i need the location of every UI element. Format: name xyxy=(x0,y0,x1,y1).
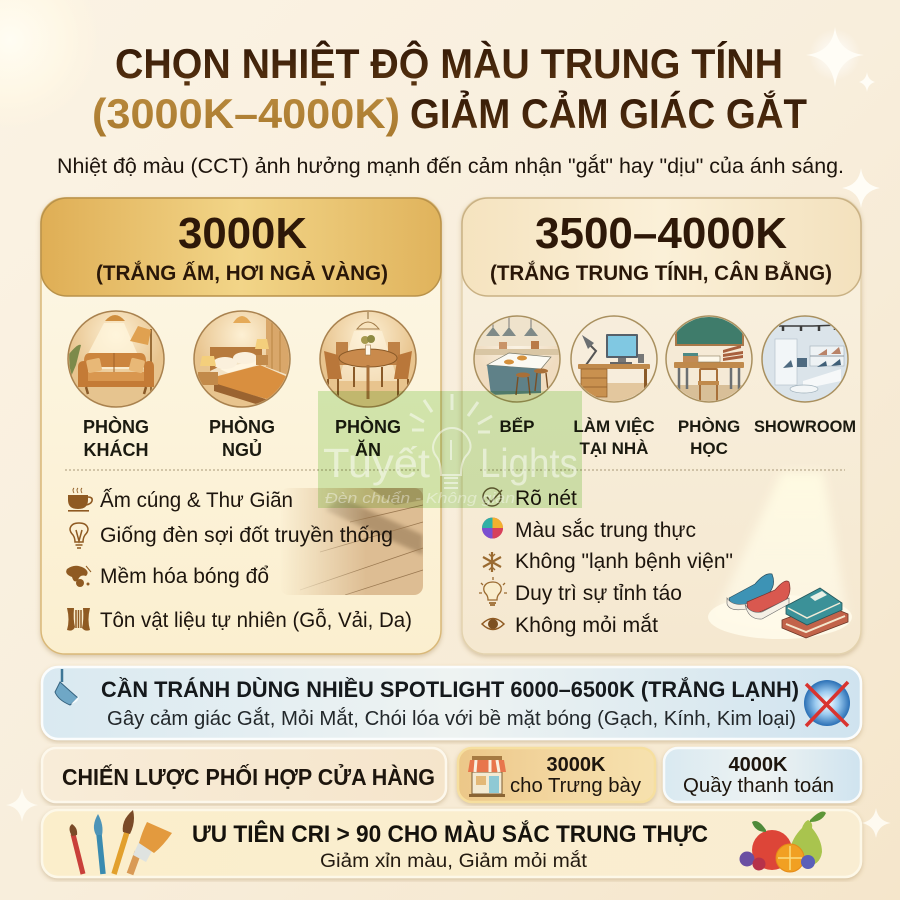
icon: soft shadow xyxy=(66,566,91,587)
watermark: Tuyết Lights: Tuyết xyxy=(323,440,431,486)
header: 3000K: 3000K xyxy=(178,209,307,258)
list: 3000K benefits: Ấm cúng & Thư Giãn xyxy=(100,489,293,512)
chip: 4000K checkout xyxy=(664,748,861,802)
icon: study room xyxy=(666,316,752,403)
chip: 4000K checkout: Quầy thanh toán xyxy=(683,775,834,797)
list: 3000K benefits xyxy=(66,488,412,632)
title: (3000K–4000K) xyxy=(92,90,400,137)
icon: watermark bulb xyxy=(410,394,492,488)
icon: snowflake xyxy=(483,552,501,572)
subtitle: Nhiệt độ màu (CCT) ảnh hưởng mạnh đến cảm nhận "gắt" hay "dịu" của ánh sáng. xyxy=(57,155,844,178)
icon: storefront xyxy=(468,756,506,797)
room labels left: PHÒNG xyxy=(209,416,275,437)
title: GIẢM CẢM GIÁC GẮT xyxy=(410,89,807,137)
title xyxy=(92,39,807,137)
title: CHỌN NHIỆT ĐỘ MÀU TRUNG TÍNH xyxy=(115,39,783,87)
icon: spotlight xyxy=(55,669,79,705)
wood floor image xyxy=(280,488,423,595)
list: neutral benefits: Màu sắc trung thực xyxy=(515,519,696,542)
room labels right xyxy=(500,417,856,458)
room labels left xyxy=(83,416,401,460)
icon: bedroom xyxy=(194,311,292,409)
icon: living room xyxy=(68,311,164,407)
icon: cup xyxy=(68,488,92,512)
banner: CRI over 90: ƯU TIÊN CRI > 90 CHO MÀU SẮC TRUNG THỰC xyxy=(192,820,708,848)
list: 3000K benefits: Mềm hóa bóng đổ xyxy=(100,565,269,588)
icon: kitchen xyxy=(474,316,560,402)
room labels left: PHÒNG xyxy=(335,416,401,437)
icon: filament bulb xyxy=(70,523,88,548)
room labels left: NGỦ xyxy=(222,439,262,460)
header: 3000K xyxy=(41,198,441,296)
panel: 3500-4000K xyxy=(462,198,861,654)
panel: 3000K xyxy=(41,198,441,654)
icon: fruit xyxy=(740,812,826,872)
banner: CRI over 90: Giảm xỉn màu, Giảm mỏi mắt xyxy=(320,850,588,872)
chip: 3000K display: 3000K xyxy=(546,754,606,776)
icon: eye xyxy=(482,618,504,630)
icon: alert bulb xyxy=(479,577,507,605)
chip: 4000K checkout: 4000K xyxy=(728,754,788,776)
room labels left: ĂN xyxy=(355,439,381,460)
icon: check xyxy=(483,488,502,506)
room labels right: PHÒNG xyxy=(678,417,740,436)
chip: 3000K display xyxy=(458,748,655,802)
list: 3000K benefits: Giống đèn sợi đốt truyền thống xyxy=(100,524,393,547)
room labels right: HỌC xyxy=(690,439,728,458)
header: 3500-4000K: (TRẮNG TRUNG TÍNH, CÂN BẰNG) xyxy=(490,261,832,285)
watermark: Tuyết Lights: Đèn chuẩn - Không gian xyxy=(325,490,515,507)
header: 3500-4000K: 3500–4000K xyxy=(535,209,787,258)
icon: brushes xyxy=(70,810,172,874)
banner: store strategy: CHIẾN LƯỢC PHỐI HỢP CỬA HÀNG xyxy=(62,762,435,790)
header: 3500-4000K xyxy=(462,198,861,296)
icon: showroom xyxy=(762,316,848,402)
room labels left: PHÒNG xyxy=(83,416,149,437)
chip: 3000K display: cho Trưng bày xyxy=(510,775,641,797)
watermark: Tuyết Lights xyxy=(318,391,582,508)
list: neutral benefits: Duy trì sự tỉnh táo xyxy=(515,582,682,605)
room labels left: KHÁCH xyxy=(84,439,148,460)
room labels right: LÀM VIỆC xyxy=(573,417,655,436)
icon: home office xyxy=(571,316,657,403)
list: 3000K benefits: Tôn vật liệu tự nhiên (Gỗ, Vải, Da) xyxy=(100,609,412,632)
icon: natural materials xyxy=(67,608,90,631)
banner: avoid cold spotlight: Gây cảm giác Gắt, Mỏi Mắt, Chói lóa với bề mặt bóng (Gạch, Kính, Kim loại) xyxy=(107,707,796,730)
list: neutral benefits xyxy=(479,487,733,637)
room labels right: TẠI NHÀ xyxy=(580,439,648,458)
light beam xyxy=(708,472,852,639)
room labels right: BẾP xyxy=(500,417,534,436)
header: 3000K: (TRẮNG ẤM, HƠI NGẢ VÀNG) xyxy=(96,261,388,285)
watermark: Tuyết Lights: Lights xyxy=(480,440,578,486)
icon: shoes and books xyxy=(727,574,848,638)
banner: avoid cold spotlight xyxy=(42,667,861,739)
icon: color wheel xyxy=(482,518,503,538)
icon: dining room xyxy=(320,311,416,407)
banner: store strategy xyxy=(42,748,446,802)
banner: avoid cold spotlight: CẦN TRÁNH DÙNG NHIỀU SPOTLIGHT 6000–6500K (TRẮNG LẠNH) xyxy=(101,677,799,702)
list: neutral benefits: Rõ nét xyxy=(515,487,577,510)
list: neutral benefits: Không "lạnh bệnh viện" xyxy=(515,550,733,573)
banner: CRI over 90 xyxy=(42,810,861,877)
room labels right: SHOWROOM xyxy=(754,417,856,436)
list: neutral benefits: Không mỏi mắt xyxy=(515,614,658,637)
icon: cold light crossed xyxy=(804,680,850,726)
